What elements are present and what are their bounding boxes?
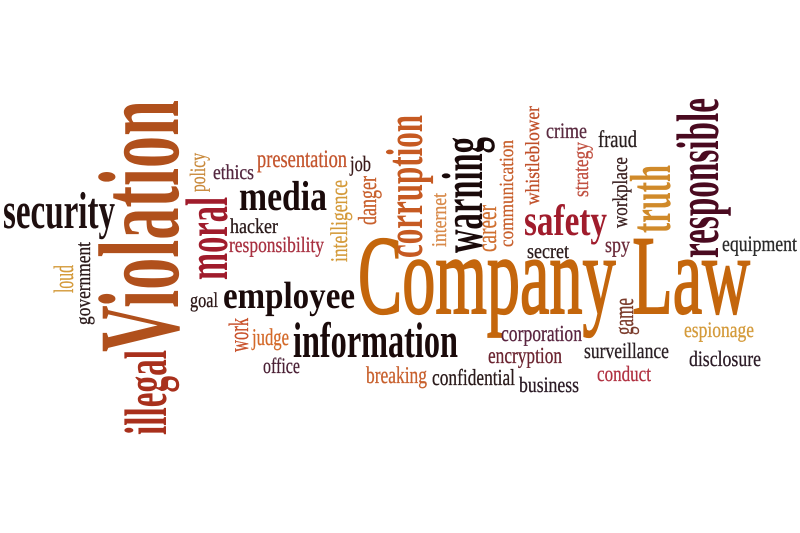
- word: warning: warning: [430, 137, 495, 253]
- word: fraud: fraud: [598, 127, 637, 153]
- word: disclosure: disclosure: [689, 346, 761, 371]
- word: security: security: [3, 183, 115, 240]
- word: moral: moral: [174, 197, 240, 280]
- word: encryption: encryption: [488, 343, 562, 368]
- word: corporation: corporation: [501, 321, 582, 346]
- word: hacker: hacker: [230, 214, 278, 238]
- word: truth: truth: [618, 165, 683, 233]
- word: illegal: illegal: [113, 350, 180, 435]
- word: intelligence: intelligence: [327, 180, 353, 262]
- word: judge: judge: [251, 325, 289, 351]
- word: safety: safety: [524, 196, 607, 245]
- word: responsibility: responsibility: [229, 232, 324, 257]
- main words and surrounding terms: [3, 98, 797, 435]
- word: corruption: corruption: [377, 115, 434, 258]
- word: communication: communication: [496, 140, 518, 247]
- word: strategy: strategy: [568, 142, 593, 197]
- word: conduct: conduct: [597, 361, 651, 386]
- word: career: career: [472, 205, 503, 252]
- word: office: office: [263, 353, 300, 378]
- word: internet: internet: [427, 193, 451, 247]
- word: surveillance: surveillance: [584, 338, 669, 363]
- word: policy: policy: [185, 153, 210, 192]
- word: loud: loud: [49, 265, 80, 293]
- word: game: game: [609, 298, 640, 335]
- word: media: media: [239, 174, 327, 220]
- word: job: job: [349, 151, 371, 176]
- word: danger: danger: [353, 176, 382, 225]
- word: presentation: presentation: [257, 146, 347, 173]
- word: breaking: breaking: [366, 363, 427, 389]
- word: information: information: [293, 312, 458, 368]
- word: espionage: espionage: [684, 317, 754, 342]
- word: workplace: workplace: [608, 157, 632, 228]
- word: goal: goal: [190, 288, 218, 312]
- word: business: business: [519, 372, 579, 397]
- word: crime: crime: [546, 118, 587, 143]
- word: work: work: [224, 318, 255, 352]
- word: employee: employee: [223, 275, 355, 317]
- word: spy: spy: [605, 232, 630, 257]
- word: whistleblower: whistleblower: [522, 106, 544, 205]
- word: ethics: ethics: [213, 160, 254, 184]
- word: secret: secret: [527, 239, 569, 263]
- word: confidential: confidential: [432, 365, 515, 390]
- word: government: government: [71, 242, 95, 325]
